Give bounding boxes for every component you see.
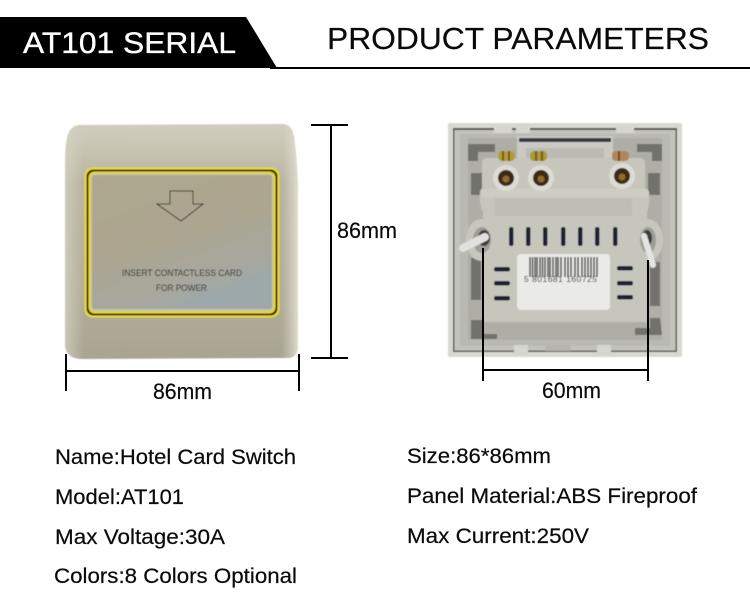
dimension: front height [311, 124, 348, 359]
top window [517, 136, 613, 160]
terminal screws [498, 151, 629, 161]
label: 86mm width: 86mm [153, 379, 212, 404]
specifications: right column: Panel Material:ABS Fireproof [407, 484, 697, 508]
outer frame [448, 123, 682, 357]
barcode [530, 257, 597, 277]
product photo: front of card switch: FOR POWER [156, 283, 207, 294]
heading: product parameters: PRODUCT PARAMETERS [327, 21, 709, 56]
specifications: left column: Colors:8 Colors Optional [54, 564, 297, 588]
barcode number: 5 801681 160725 [524, 274, 597, 284]
header banner: AT101 SERIAL [0, 17, 277, 68]
arrow icon [157, 191, 203, 221]
terminal holes [493, 163, 635, 191]
label: 60mm: 60mm [542, 378, 601, 403]
gold frame [84, 168, 280, 318]
product photo: front of card switch [65, 124, 298, 359]
specifications: left column [54, 445, 297, 588]
heading rule [270, 67, 750, 69]
specifications: left column: Name:Hotel Card Switch [55, 445, 296, 469]
dimension: front width [65, 354, 300, 391]
specifications: right column [407, 444, 697, 548]
top and bottom tabs [494, 124, 634, 355]
vent slots [494, 227, 633, 300]
specifications: right column: Max Current:250V [407, 524, 590, 548]
module body [480, 158, 649, 322]
screw ears [466, 219, 496, 261]
panel text: INSERT CONTACTLESS CARD [122, 268, 242, 279]
barcode label [517, 254, 610, 310]
specifications: left column: Max Voltage:30A [55, 525, 226, 549]
header banner: AT101 SERIAL: AT101 SERIAL [23, 27, 236, 60]
specifications: left column: Model:AT101 [55, 485, 184, 509]
product photo: back of card switch [448, 123, 682, 357]
dimension: mounting hole spacing [482, 248, 649, 381]
dark tray recesses [468, 144, 662, 339]
specifications: right column: Size:86*86mm [407, 444, 551, 468]
label: 86mm height: 86mm [337, 218, 397, 243]
card panel [92, 175, 272, 309]
mounting screws [463, 237, 485, 248]
